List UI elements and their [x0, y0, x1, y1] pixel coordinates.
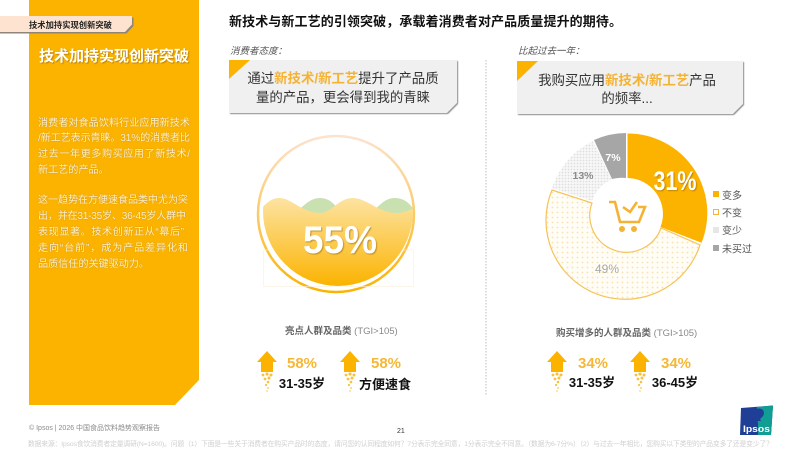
value: 13%: 13% — [572, 170, 594, 182]
text block: second paragraph: 走向“台前”，成为产品差异化和 — [38, 241, 188, 254]
text block: second paragraph — [38, 193, 188, 270]
value: 7%: 7% — [605, 152, 621, 164]
stat: 58% convenience food — [340, 351, 411, 392]
heading: highlight groups right: 购买增多的人群及品类 (TGI>105) — [556, 327, 697, 339]
legend: donut: 未买过 — [722, 242, 752, 256]
text block: first paragraph: 消费者对食品饮料行业应用新技术 — [38, 116, 190, 129]
section tag: 技术加持实现创新突破 — [29, 20, 113, 30]
logo: Ipsos — [740, 406, 773, 435]
chart: purchase frequency donut — [546, 133, 707, 299]
legend: donut: 变少 — [722, 224, 742, 237]
chart: 55% liquid gauge — [258, 136, 416, 292]
text block: second paragraph: 这一趋势在方便速食品类中尤为突 — [38, 193, 188, 206]
segment: 31% more — [628, 133, 707, 243]
footer: copyright: © Ipsos | 2026 中国食品饮料趋势观察报告 — [29, 423, 160, 432]
stat: 58% aged 31-35: 58% — [287, 355, 317, 372]
section tag — [0, 16, 134, 34]
text block: first paragraph: 新工艺的产品。 — [38, 163, 109, 176]
label: consumer attitude: 消费者态度： — [230, 45, 287, 57]
icon: shopping cart — [609, 202, 645, 232]
legend: donut — [713, 189, 752, 256]
panel: left orange summary — [29, 0, 199, 405]
segment: 7% never bought — [594, 133, 626, 179]
logo: Ipsos: Ipsos — [743, 424, 770, 435]
heading: highlight groups left: 亮点人群及品类 (TGI>105) — [285, 325, 398, 337]
segment: 13% less — [552, 141, 612, 201]
footer: page number: 21 — [397, 428, 405, 435]
stat: 34% aged 36-45 — [630, 351, 698, 392]
segment: 49% unchanged — [546, 190, 700, 299]
stat: 34% aged 31-35: 34% — [578, 355, 608, 372]
text block: first paragraph: 过去一年更多购买应用了新技术/ — [38, 147, 190, 160]
stat: 58% aged 31-35 — [257, 351, 325, 392]
footer: data source: 数据来源：Ipsos食饮消费者定量调研(N=1600)。问题（1）下面是一些关于消费者在购买产品时的态度，请问您的认同程度如何？7分表示完全同意，1分表示完全不同意。（数据为6-7分%）（2）与过去一年相比，您购买以下类型的产品变多了还是变少了？ — [28, 439, 773, 448]
legend: donut: 不变 — [722, 206, 742, 220]
value: 49%: 49% — [595, 262, 619, 276]
stat: 34% aged 31-35: 31-35岁 — [569, 375, 615, 390]
stat: 58% convenience food: 方便速食 — [359, 377, 411, 392]
main title: 新技术与新工艺的引领突破，承载着消费者对产品质量提升的期待。 — [229, 14, 622, 29]
callout: purchase frequency — [517, 61, 743, 114]
heading: panel title: 技术加持实现创新突破 — [39, 47, 189, 65]
text block: first paragraph — [38, 116, 190, 176]
stat: 58% convenience food: 58% — [371, 355, 401, 372]
callout: consumer attitude: 量的产品，更会得到我的青睐 — [256, 89, 430, 105]
stat: 34% aged 31-35 — [547, 351, 615, 392]
callout: purchase frequency: 我购买应用新技术/新工艺产品 — [538, 72, 716, 88]
text block: second paragraph: 品质信任的关键驱动力。 — [38, 257, 149, 270]
label: compared with last year: 比起过去一年： — [518, 45, 585, 57]
stat: 58% aged 31-35: 31-35岁 — [279, 376, 325, 391]
callout: purchase frequency: 的频率... — [601, 90, 653, 106]
callout: consumer attitude: 通过新技术/新工艺提升了产品质 — [247, 70, 439, 86]
stat: 34% aged 36-45: 34% — [661, 355, 691, 372]
callout: consumer attitude — [229, 60, 457, 113]
text block: second paragraph: 出，并在31-35岁、36-45岁人群中 — [38, 209, 186, 222]
legend: donut: 变多 — [722, 189, 742, 202]
value: 31%: 31% — [654, 166, 696, 196]
text block: first paragraph: /新工艺表示青睐。31%的消费者比 — [38, 131, 190, 144]
text block: second paragraph: 表现显著。技术创新正从“幕后” — [38, 225, 184, 238]
stat: 34% aged 36-45: 36-45岁 — [652, 375, 698, 390]
chart: 55% liquid gauge: 55% — [303, 219, 377, 262]
